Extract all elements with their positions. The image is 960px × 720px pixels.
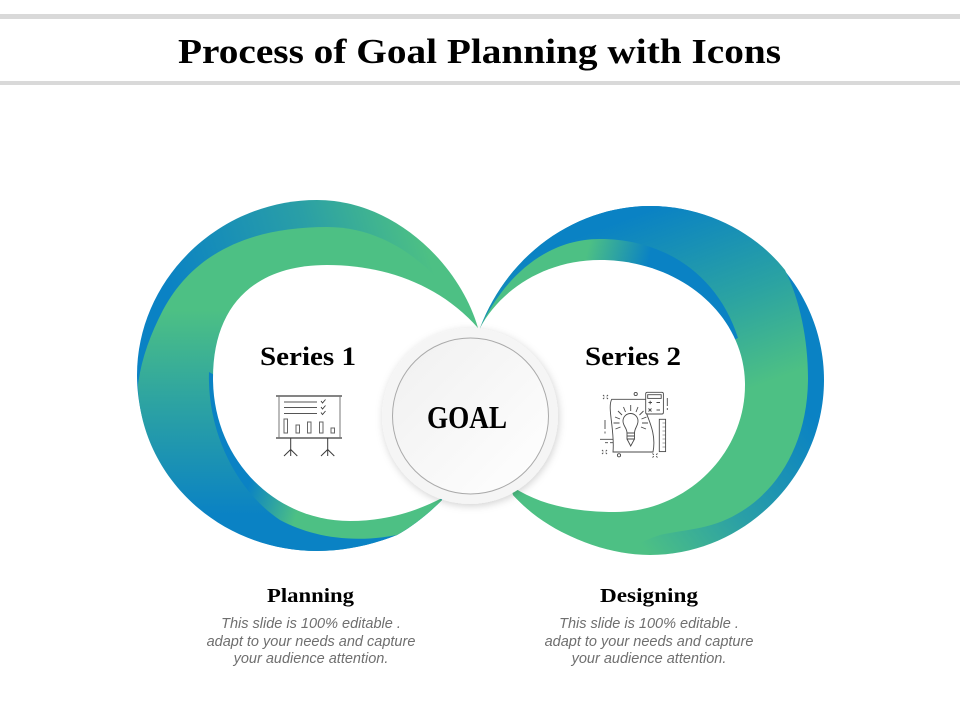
title: Process of Goal Planning with Icons (178, 32, 781, 71)
block: planning: This slide is 100% editable . (221, 616, 401, 632)
block: designing: This slide is 100% editable . (559, 616, 739, 632)
heading: series 2: Series 2 (585, 342, 681, 371)
left ring (137, 200, 478, 551)
goal circle: GOAL (427, 399, 507, 435)
heading: series 1: Series 1 (260, 342, 356, 371)
block: planning (207, 585, 415, 667)
icon: presentation board (276, 396, 342, 456)
icon: lightbulb plan (600, 392, 667, 458)
block: planning: adapt to your needs and capture (207, 634, 415, 650)
block: planning: Planning (267, 585, 354, 607)
header band (0, 14, 960, 85)
block: designing: your audience attention. (571, 651, 726, 667)
block: designing: adapt to your needs and capture (545, 634, 753, 650)
right ring (480, 206, 824, 555)
block: designing: Designing (600, 585, 698, 607)
goal circle (382, 328, 558, 504)
block: designing (545, 585, 753, 667)
block: planning: your audience attention. (233, 651, 388, 667)
